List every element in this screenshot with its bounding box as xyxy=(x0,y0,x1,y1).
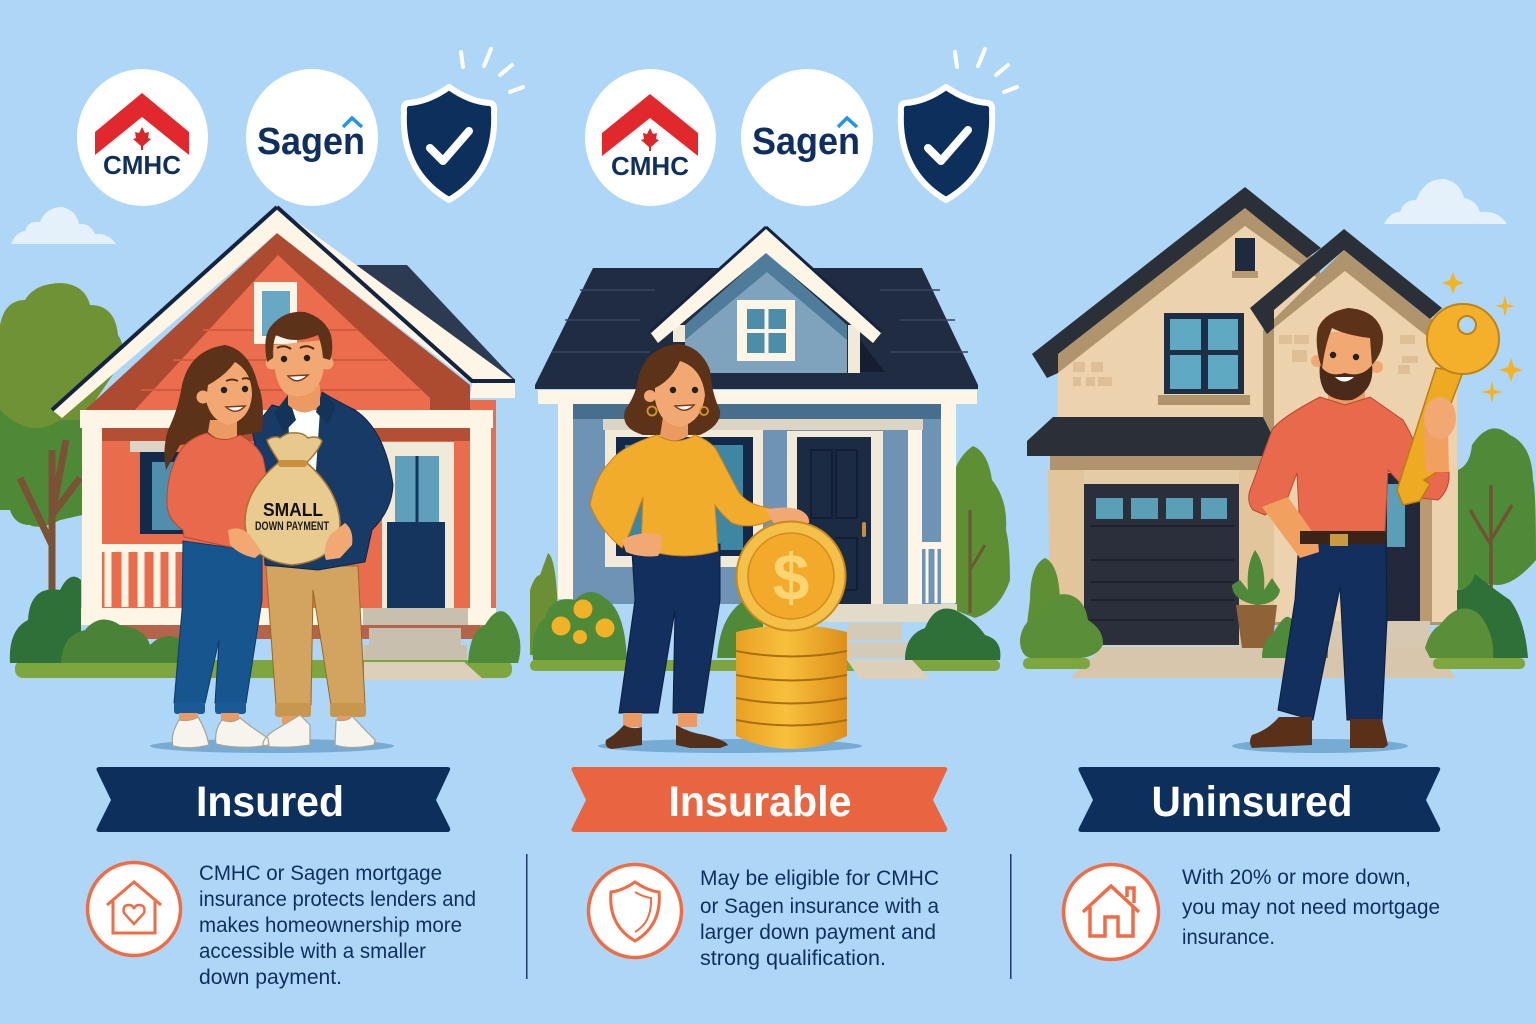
shirt xyxy=(1249,397,1449,532)
house: insured red xyxy=(52,207,515,662)
dormer window xyxy=(254,282,297,344)
hands xyxy=(765,508,809,525)
shrubs and lawn: insured xyxy=(10,577,520,680)
steps and driveway xyxy=(1330,621,1430,656)
tree: center right xyxy=(955,446,1010,618)
shoes xyxy=(172,715,375,748)
icon: golden key with sparkles xyxy=(1397,272,1523,505)
logo: CMHC center xyxy=(585,69,716,206)
money bag xyxy=(245,463,340,565)
logo: Sagen center: Sagen xyxy=(752,121,860,163)
person: man with key xyxy=(1232,308,1449,753)
man neck and ears xyxy=(288,385,320,412)
upper left body xyxy=(1058,208,1320,420)
banner: Insurable: Insurable xyxy=(668,778,852,826)
cloud: right xyxy=(1384,179,1507,224)
face xyxy=(1322,332,1372,390)
man torso xyxy=(252,392,393,570)
text: insured description xyxy=(199,862,476,989)
shoes xyxy=(606,725,728,749)
fascia xyxy=(538,390,977,404)
jeans xyxy=(619,544,720,713)
text: uninsured description xyxy=(1182,866,1440,949)
icon: house with heart xyxy=(88,862,180,956)
front door xyxy=(1380,473,1432,623)
banner: Uninsured xyxy=(1078,767,1440,832)
woman torso xyxy=(167,433,267,548)
right wing xyxy=(1263,250,1457,625)
icon: gold coin stack: $ xyxy=(773,540,809,614)
forearm left xyxy=(1262,497,1319,558)
tree: right xyxy=(1458,428,1536,590)
house: uninsured beige xyxy=(1027,187,1457,678)
divider left xyxy=(526,854,528,979)
brick details xyxy=(1073,335,1418,386)
woman hair xyxy=(164,345,263,470)
jeans xyxy=(1278,540,1387,720)
beard xyxy=(1320,365,1372,400)
ears xyxy=(1311,355,1323,367)
person: woman in yellow xyxy=(590,344,862,753)
tree: left xyxy=(0,283,123,590)
logo: CMHC left: CMHC xyxy=(103,150,181,180)
wall xyxy=(100,400,496,630)
hair xyxy=(624,344,720,435)
text: insurable description: May be eligible for CMHC xyxy=(700,867,939,890)
text: insured description: accessible with a smaller xyxy=(199,940,426,963)
text: insured description: CMHC or Sagen mortgage xyxy=(199,862,442,885)
text: uninsured description: With 20% or more down, xyxy=(1182,866,1411,889)
logo: CMHC center: CMHC xyxy=(611,151,689,181)
people: couple: SMALL xyxy=(263,500,323,520)
text: insurable description: larger down payment and xyxy=(700,921,936,944)
shrubs and lawn: insurable xyxy=(530,553,1000,679)
text: uninsured description: insurance. xyxy=(1182,926,1275,949)
text: insurable description xyxy=(700,867,939,970)
neck xyxy=(660,417,688,440)
man legs xyxy=(266,566,365,705)
icon: shield center xyxy=(901,49,1017,200)
posts xyxy=(558,398,573,599)
belt xyxy=(1300,531,1385,544)
door xyxy=(787,431,883,604)
banner: Insured xyxy=(96,767,450,832)
people: couple xyxy=(150,312,394,753)
left roof xyxy=(1032,187,1321,378)
icon: gold coin stack xyxy=(736,522,847,749)
lower wall xyxy=(1050,456,1274,646)
woman face xyxy=(196,390,210,404)
gable fascia xyxy=(52,207,515,418)
neck xyxy=(1328,390,1365,420)
porch beam xyxy=(603,419,923,430)
logo: Sagen left xyxy=(246,69,378,206)
hands xyxy=(228,528,262,558)
shoes xyxy=(1250,717,1388,748)
door xyxy=(382,442,454,608)
cloud: left xyxy=(11,207,116,244)
icon: shield outline xyxy=(588,864,682,958)
garage door xyxy=(1084,484,1239,645)
woman neck xyxy=(208,420,237,440)
woman legs xyxy=(174,541,262,703)
text: insured description: makes homeownership more xyxy=(199,914,462,937)
steps xyxy=(363,608,468,662)
man head xyxy=(274,340,325,396)
logo: CMHC left xyxy=(77,69,208,206)
shrubs and plant: uninsured xyxy=(1020,550,1528,669)
text: insured description: down payment. xyxy=(199,966,342,989)
logo: Sagen center xyxy=(741,69,873,206)
logo: Sagen left: Sagen xyxy=(257,121,365,163)
window xyxy=(605,430,763,567)
icon: house with chimney xyxy=(1064,864,1158,960)
window left xyxy=(130,441,170,452)
face xyxy=(644,390,656,402)
dark side roof xyxy=(345,265,515,384)
hair xyxy=(1317,308,1383,369)
people: couple: DOWN PAYMENT xyxy=(255,521,329,533)
roof xyxy=(535,268,978,389)
garage roof xyxy=(1027,417,1275,456)
text: uninsured description: you may not need mortgage xyxy=(1182,896,1440,919)
banner: Insurable xyxy=(571,767,947,832)
dormer xyxy=(685,252,847,373)
banner: Insured: Insured xyxy=(196,778,344,826)
banner: Uninsured: Uninsured xyxy=(1152,778,1352,826)
porch beam xyxy=(80,410,493,428)
text: insured description: insurance protects lenders and xyxy=(199,888,476,911)
right roof xyxy=(1250,229,1442,334)
sweater xyxy=(590,435,772,556)
icon: shield left xyxy=(404,49,523,200)
divider right xyxy=(1010,854,1012,979)
attic window xyxy=(1235,238,1255,271)
posts and railing xyxy=(82,427,102,610)
text: insurable description: or Sagen insurance with a xyxy=(700,895,939,918)
text: insurable description: strong qualification. xyxy=(700,947,886,970)
steps xyxy=(847,623,908,658)
main window xyxy=(1164,313,1244,394)
house: insurable blue xyxy=(535,227,978,658)
